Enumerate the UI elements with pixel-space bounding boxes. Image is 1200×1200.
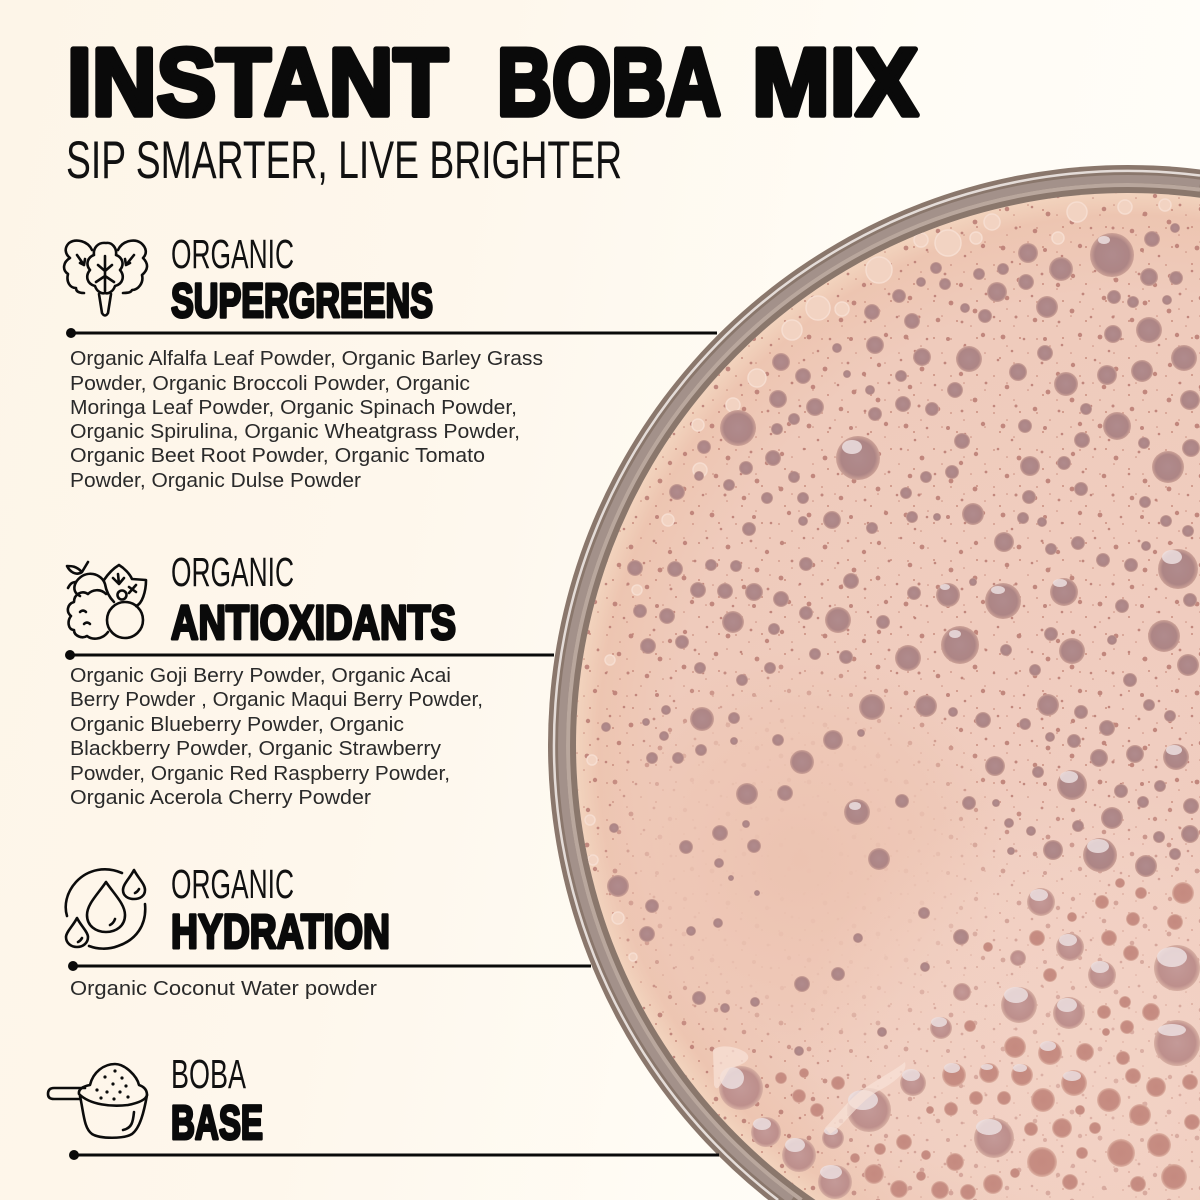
section: organic supergreens xyxy=(64,231,717,492)
lower foam bubbles xyxy=(719,888,1200,1199)
icon: water drops xyxy=(66,869,145,949)
icon: berries xyxy=(67,562,146,639)
icon: scoop of powder xyxy=(48,1064,147,1138)
foam surface xyxy=(570,190,1200,1200)
upper bubbles xyxy=(627,223,1200,687)
ingredient list: Powder, Organic Broccoli Powder, Organic xyxy=(70,373,470,395)
heading: boba: BOBA xyxy=(171,1051,246,1097)
ingredient list: Blackberry Powder, Organic Strawberry xyxy=(70,738,441,760)
heading: supergreens: SUPERGREENS xyxy=(171,275,433,328)
heading: organic: ORGANIC xyxy=(171,861,294,907)
title: BOBA xyxy=(497,29,721,136)
ingredient list: Organic Blueberry Powder, Organic xyxy=(70,714,404,736)
subtitle: SIP SMARTER, LIVE BRIGHTER xyxy=(66,131,622,190)
ingredient list xyxy=(70,665,483,809)
illustration: top view of boba drink in a glass xyxy=(548,165,1200,1200)
foam film patches xyxy=(713,1046,905,1134)
ingredient list: Powder, Organic Red Raspberry Powder, xyxy=(70,763,450,785)
pale rim bubbles xyxy=(585,199,1171,961)
title: MIX xyxy=(752,29,918,136)
heading: hydration: HYDRATION xyxy=(171,906,390,959)
title xyxy=(67,29,918,136)
divider with dot xyxy=(65,650,554,660)
section: boba base xyxy=(48,1051,719,1160)
middle bubbles xyxy=(601,694,1199,1056)
heading: organic: ORGANIC xyxy=(171,231,294,277)
heading: base: BASE xyxy=(171,1097,263,1150)
divider with dot xyxy=(66,328,717,338)
section: organic antioxidants xyxy=(65,549,554,809)
heading: antioxidants: ANTIOXIDANTS xyxy=(171,597,456,650)
divider with dot xyxy=(68,961,591,971)
divider with dot xyxy=(69,1150,719,1160)
ingredient list: Powder, Organic Dulse Powder xyxy=(70,470,361,492)
ingredient list: Organic Alfalfa Leaf Powder, Organic Barley Grass xyxy=(70,348,543,370)
section: organic hydration xyxy=(66,861,591,1000)
heading: organic: ORGANIC xyxy=(171,549,294,595)
ingredient list: Organic Spirulina, Organic Wheatgrass Powder, xyxy=(70,421,520,443)
ingredient list: Organic Beet Root Powder, Organic Tomato xyxy=(70,445,485,467)
icon: leafy greens xyxy=(64,241,147,316)
ingredient list: Berry Powder , Organic Maqui Berry Powder, xyxy=(70,689,483,711)
title: INSTANT xyxy=(67,29,448,136)
ingredient list xyxy=(70,348,543,492)
powder specks xyxy=(95,1069,130,1101)
bubble highlights xyxy=(720,236,1187,1179)
glass rim xyxy=(548,165,1200,1200)
ingredient list: Organic Acerola Cherry Powder xyxy=(70,787,371,809)
ingredient list: Moringa Leaf Powder, Organic Spinach Powder, xyxy=(70,397,517,419)
ingredient list: Organic Coconut Water powder xyxy=(70,978,377,1000)
ingredient list: Organic Goji Berry Powder, Organic Acai xyxy=(70,665,451,687)
